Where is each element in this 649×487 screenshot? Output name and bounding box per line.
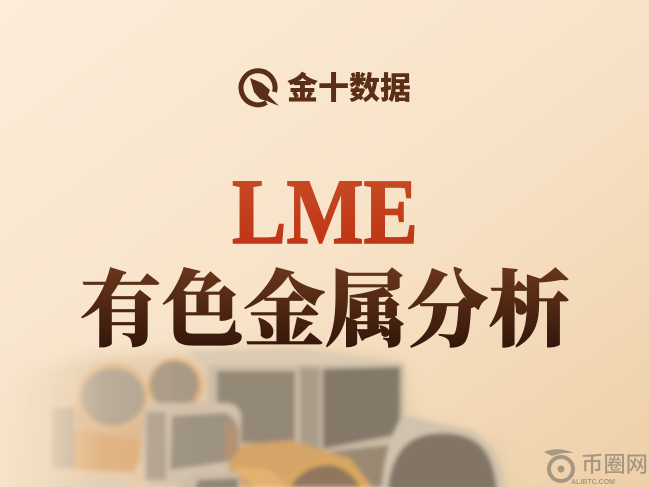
logo: Jin10 Data: [241, 63, 411, 108]
copper tube left body: [74, 406, 144, 465]
watermark: alibtc: [544, 447, 648, 486]
bottom left tube: [40, 478, 130, 487]
logo text: 金十数据: [287, 63, 411, 108]
title: LME: LME: [232, 161, 418, 264]
watermark icon: [544, 449, 574, 481]
top faces of square tubes: [189, 348, 390, 364]
title: non-ferrous metals analysis: 有色金属分析: [80, 265, 570, 357]
copper round tube 2: [148, 359, 202, 413]
oval tube: [382, 415, 505, 487]
rounded square tube front: [143, 403, 241, 485]
square tube right: [300, 364, 406, 452]
metal pipes photo: [0, 348, 510, 487]
logo icon: [241, 71, 279, 106]
watermark text: 币圈网: [581, 447, 648, 479]
copper round tube 1: [78, 362, 150, 409]
watermark url: ALIBTC.COM: [571, 479, 615, 486]
square tube back: [208, 366, 296, 404]
dark ground behind tubes: [331, 444, 390, 487]
copper tube front: [228, 440, 372, 487]
